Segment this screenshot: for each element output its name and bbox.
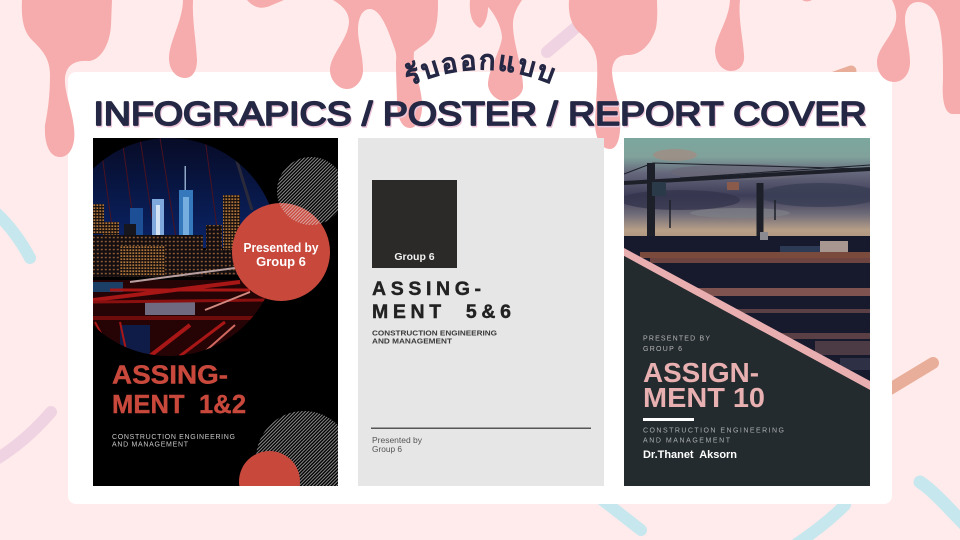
photo: construction site with cranes <box>620 138 880 391</box>
poster 3 subtitle: CONSTRUCTION ENGINEERING <box>643 428 784 434</box>
poster 3 heading: MENT 10 <box>643 382 765 413</box>
poster 1 subtitle <box>112 434 234 446</box>
red circle with presenter text: Presented by <box>244 240 319 255</box>
poster 1 heading <box>112 365 246 414</box>
panel: poster 2 <box>358 138 604 486</box>
photo: city skyline at night in circle <box>93 138 270 356</box>
striped circle top <box>277 157 345 225</box>
poster 2 heading: ASSING- <box>372 278 481 300</box>
presenter note: Presented by <box>372 436 422 445</box>
poster 3 subtitle: AND MANAGEMENT <box>643 438 731 444</box>
red circle bottom <box>239 451 300 486</box>
title: curved Thai heading: รับออกแบบ <box>404 54 556 84</box>
presenter text <box>643 336 710 351</box>
presenter note: Group 6 <box>372 445 403 454</box>
poster 1 heading: ASSING- <box>112 362 228 390</box>
pink paint drips <box>22 0 960 157</box>
panel: poster 1 <box>93 138 338 486</box>
panel: poster 3 <box>620 138 880 486</box>
panel: white card <box>68 72 892 504</box>
poster 1 heading: MENT 1&2 <box>112 391 246 419</box>
poster 3 heading <box>644 362 764 408</box>
dark diagonal panel <box>624 256 870 391</box>
poster 1 subtitle: CONSTRUCTION ENGINEERING <box>112 434 235 441</box>
poster 2 subtitle <box>372 328 497 346</box>
dark square with group label: Group 6 <box>394 251 435 263</box>
pink diagonal band <box>624 248 870 390</box>
title: main heading: INFOGRAPICS / POSTER / REPORT COVER <box>94 96 867 133</box>
title: main heading: INFOGRAPICS / POSTER / REPORT COVER <box>94 98 868 134</box>
poster 2 subtitle: CONSTRUCTION ENGINEERING <box>372 328 497 338</box>
poster 2 subtitle: AND MANAGEMENT <box>372 336 452 346</box>
poster 3 subtitle <box>643 428 784 442</box>
presenter text: PRESENTED BY <box>643 336 710 342</box>
presenter note <box>372 436 422 454</box>
dark square with group label <box>372 180 457 268</box>
red circle with presenter text <box>232 203 330 301</box>
divider line <box>371 428 591 429</box>
poster 2 heading <box>372 278 511 323</box>
poster 1 subtitle: AND MANAGEMENT <box>112 442 189 448</box>
red circle with presenter text: Group 6 <box>256 254 306 269</box>
striped circle overlay <box>277 157 338 225</box>
poster 2 heading: MENT 5&6 <box>372 301 511 323</box>
author name: Dr.Thanet Aksorn <box>643 449 737 461</box>
striped circle bottom <box>256 411 338 486</box>
poster 3 heading: ASSIGN- <box>643 357 759 388</box>
presenter text: GROUP 6 <box>643 346 682 353</box>
white accent bar <box>643 418 694 421</box>
